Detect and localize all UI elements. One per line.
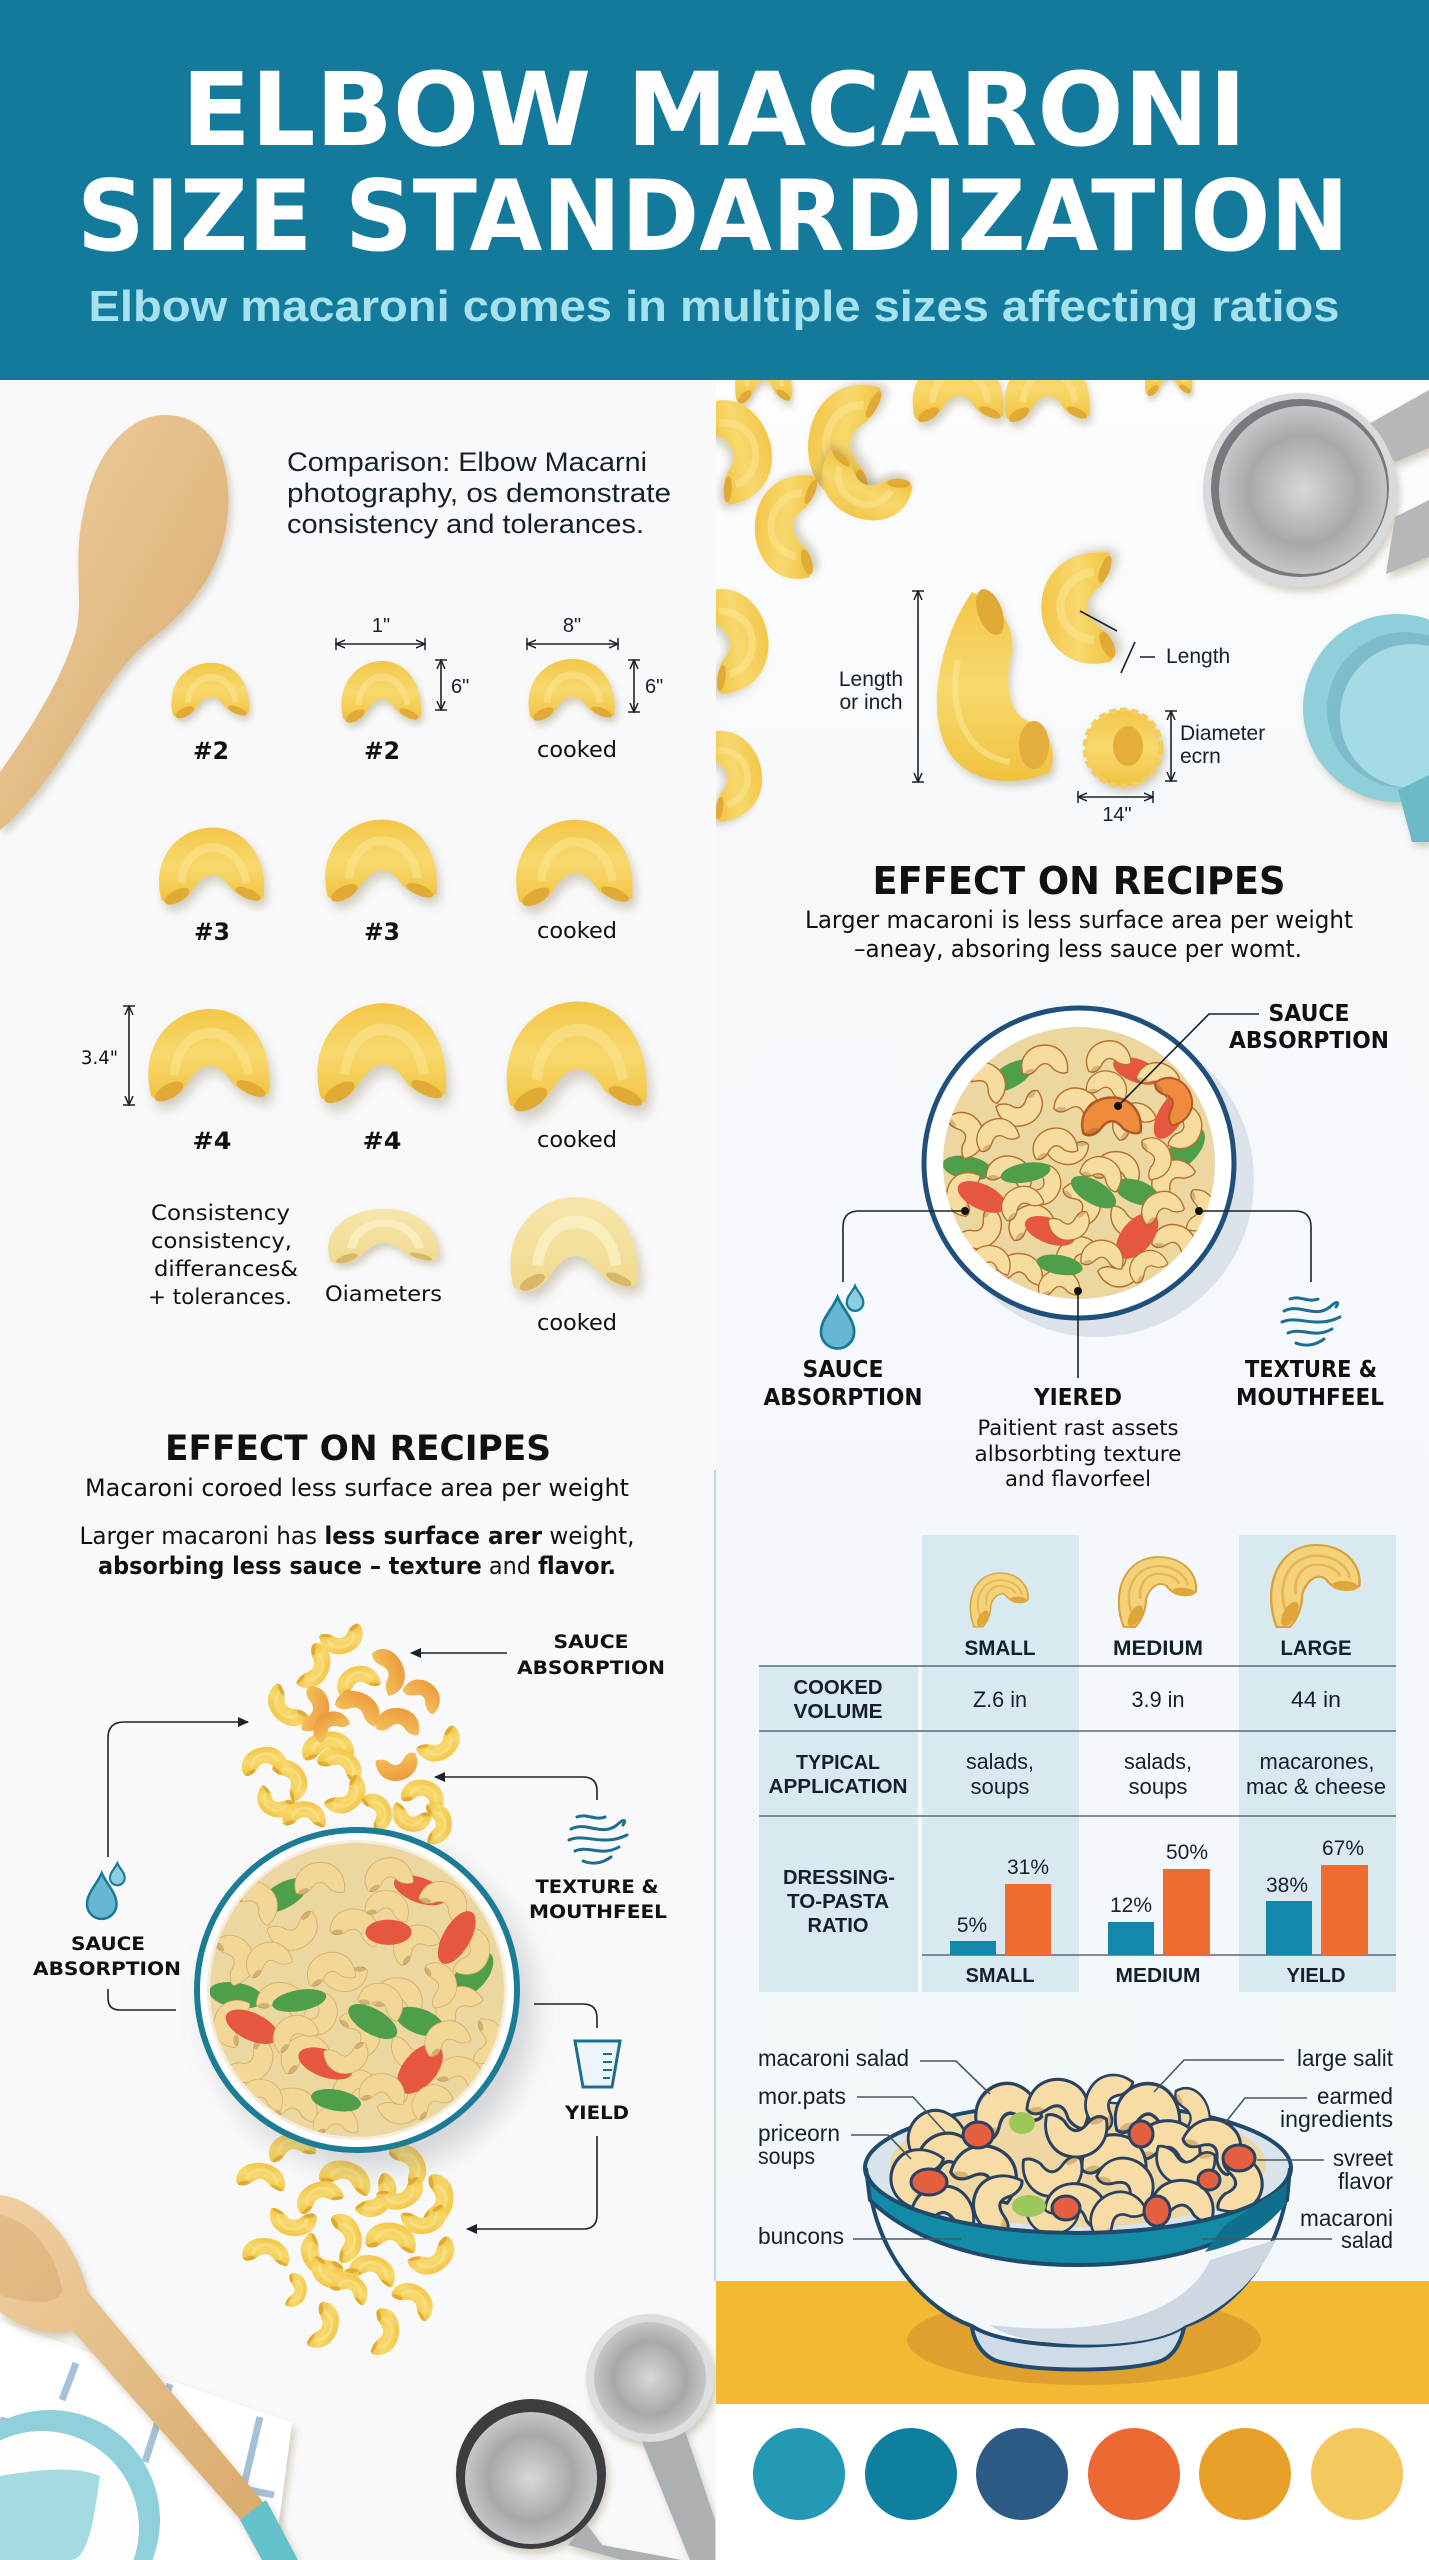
kitchen props bottom <box>0 2195 715 2560</box>
salad bowl photo <box>197 1830 517 2150</box>
bowl labels left: buncons <box>758 2223 844 2249</box>
bowl labels right: macaroni <box>1300 2205 1393 2231</box>
scattered macaroni <box>694 342 1192 823</box>
bowl tomatoes and greens <box>911 2112 1255 2226</box>
dimension: length or inch <box>839 591 918 782</box>
row: typical application: TYPICAL <box>796 1752 880 1774</box>
callout: texture and mouthfeel: MOUTHFEEL <box>529 1901 667 1923</box>
bowl labels right: flavor <box>1338 2168 1393 2194</box>
comparison intro text: Comparison: Elbow Macarni <box>287 447 647 477</box>
panel: pasta dimensions <box>694 342 1429 842</box>
dimension: diameter <box>1078 711 1265 826</box>
bar chart: yield: YIELD <box>1286 1965 1346 1987</box>
header: medium <box>1113 1557 1203 1660</box>
callout: sauce absorption left <box>764 1211 965 1411</box>
arrow: sauce absorption top: SAUCE <box>554 1631 628 1653</box>
callout: sauce absorption left: SAUCE <box>802 1357 884 1383</box>
row: cooked volume <box>794 1677 1341 1723</box>
bar chart: yield: 67% <box>1322 1837 1364 1860</box>
row: typical application: mac & cheese <box>1246 1774 1386 1799</box>
header: small <box>964 1573 1036 1660</box>
icon: teal measuring cup <box>1303 614 1429 842</box>
row: consistency: consistency, <box>151 1229 292 1253</box>
arrow: sauce absorption top: ABSORPTION <box>517 1657 665 1679</box>
row: typical application <box>768 1749 1386 1799</box>
comparison intro text: consistency and tolerances. <box>287 509 644 539</box>
row: size 2: 8" <box>563 615 581 637</box>
row: size 2: cooked <box>537 738 617 763</box>
icon: towel <box>0 2321 292 2560</box>
body text: Larger macaroni has less surface arer weight, <box>80 1522 634 1550</box>
dimension: length <box>1080 611 1230 673</box>
row: size 3: #3 <box>194 918 230 946</box>
table shading <box>759 1535 1396 1992</box>
bowl shadow <box>907 2295 1261 2385</box>
icon: teal pitcher <box>0 2410 160 2560</box>
callout: yield: albsorbting texture <box>974 1442 1182 1466</box>
bar chart: yield: 38% <box>1266 1874 1308 1897</box>
row: size 2 <box>171 615 663 765</box>
header: medium: MEDIUM <box>1113 1637 1203 1660</box>
arrow: sauce absorption top <box>411 1631 665 1679</box>
bowl labels right: ingredients <box>1280 2106 1393 2132</box>
row: size 2: #2 <box>364 737 400 765</box>
bowl contents <box>880 2065 1267 2244</box>
body text: absorbing less sauce – texture and flavor. <box>98 1552 616 1580</box>
dimension: length: Length <box>1166 645 1230 668</box>
sauce macaroni highlight <box>1082 1072 1198 1137</box>
raw macaroni pile: top <box>239 1622 467 1844</box>
bar chart: small: 31% <box>1007 1856 1049 1879</box>
bar chart: small <box>950 1856 1051 1987</box>
callout: yield <box>467 2004 629 2229</box>
dimension: length or inch: Length <box>839 668 903 691</box>
row: size 4: #4 <box>362 1127 402 1155</box>
bowl labels left: priceorn <box>758 2120 840 2146</box>
title <box>77 51 1349 274</box>
body text: –aneay, absoring less sauce per womt. <box>854 935 1302 963</box>
row: size 4 <box>81 1002 647 1155</box>
macaroni: end view <box>1085 710 1161 786</box>
callout: sauce absorption top <box>1118 1001 1389 1106</box>
header banner <box>0 0 1429 380</box>
bowl labels left: soups <box>758 2143 815 2169</box>
callout: texture and mouthfeel: TEXTURE & <box>1245 1357 1377 1383</box>
row: consistency: Consistency <box>151 1201 290 1225</box>
title: SIZE STANDARDIZATION <box>77 160 1349 274</box>
comparison intro text <box>287 447 671 539</box>
row: size 4: cooked <box>537 1128 617 1153</box>
row: size 3 <box>159 820 633 946</box>
colour palette <box>716 2404 1429 2560</box>
row: size 2: #2 <box>193 737 229 765</box>
dimension: diameter: Diameter <box>1180 722 1265 745</box>
title: ELBOW MACARONI <box>182 51 1246 170</box>
bar chart: medium: 50% <box>1166 1841 1208 1864</box>
row: cooked volume: Z.6 in <box>973 1687 1027 1712</box>
callout: texture and mouthfeel <box>1199 1211 1384 1411</box>
yellow table band <box>716 2281 1429 2404</box>
row: typical application: macarones, <box>1260 1749 1374 1774</box>
panel: effect on recipes (left) <box>0 1429 715 2560</box>
callout: yield: and flavorfeel <box>1005 1467 1151 1491</box>
swatch row <box>753 2428 1403 2520</box>
bowl labels right: large salit <box>1297 2045 1394 2071</box>
bar chart: small: 5% <box>957 1914 987 1937</box>
row: consistency: + tolerances. <box>148 1285 292 1309</box>
illustrated salad bowl <box>924 1008 1254 1337</box>
comparison intro text: photography, os demonstrate <box>287 478 671 508</box>
bowl labels right: earmed <box>1317 2083 1393 2109</box>
row: consistency: cooked <box>537 1311 617 1336</box>
macaroni: elbow view <box>1041 552 1119 664</box>
row: size 4: #4 <box>192 1127 232 1155</box>
callout: texture and mouthfeel: TEXTURE & <box>536 1876 658 1898</box>
callout: sauce absorption top: ABSORPTION <box>1229 1028 1389 1054</box>
panel: size comparison <box>0 415 671 1336</box>
body text <box>80 1474 634 1580</box>
icon: measuring cups <box>456 2314 715 2560</box>
bowl labels right <box>1154 2045 1394 2253</box>
heading: EFFECT ON RECIPES <box>165 1429 551 1469</box>
bar chart: medium: 12% <box>1110 1894 1152 1917</box>
row: size 2: 6" <box>451 676 469 698</box>
subtitle: Elbow macaroni comes in multiple sizes affecting ratios <box>88 282 1340 331</box>
row label: dressing-to-pasta ratio: DRESSING- <box>783 1867 895 1889</box>
row: consistency: differances& <box>154 1257 298 1281</box>
bar chart: small: SMALL <box>966 1965 1034 1987</box>
bowl labels right: svreet <box>1333 2145 1394 2171</box>
raw macaroni pile: bottom <box>235 2129 462 2358</box>
header: large: LARGE <box>1280 1637 1352 1660</box>
row: size 2: 1" <box>372 615 390 637</box>
icon: steel measuring cup <box>1203 390 1429 587</box>
row: size 4: 3.4" <box>81 1047 118 1069</box>
row: consistency: Oiameters <box>325 1282 442 1306</box>
row: cooked volume: 44 in <box>1291 1687 1341 1712</box>
callout: sauce absorption left: SAUCE <box>71 1933 145 1955</box>
row: typical application: soups <box>1128 1774 1188 1799</box>
body text: Macaroni coroed less surface area per weight <box>85 1474 629 1502</box>
callout: yield: YIELD <box>564 2102 629 2124</box>
callout: yield: Paitient rast assets <box>978 1416 1178 1440</box>
panel: serving bowl <box>716 2045 1429 2404</box>
body text: Larger macaroni is less surface area per weight <box>805 906 1353 934</box>
callout: sauce absorption left <box>33 1722 248 2010</box>
row: cooked volume: COOKED <box>794 1677 882 1699</box>
row: cooked volume: 3.9 in <box>1132 1687 1184 1712</box>
bar chart: medium <box>1108 1841 1210 1987</box>
panel: effect on recipes (right) <box>764 859 1389 1491</box>
header: small: SMALL <box>964 1637 1036 1660</box>
body text <box>805 906 1353 963</box>
callout: yield: YIERED <box>1033 1385 1122 1411</box>
row label: dressing-to-pasta ratio: RATIO <box>808 1915 868 1937</box>
row: size 3: cooked <box>537 919 617 944</box>
row: size 2: 6" <box>645 676 663 698</box>
header: large <box>1271 1545 1360 1660</box>
bowl labels left: macaroni salad <box>758 2045 909 2071</box>
dimension: diameter: ecrn <box>1180 745 1221 768</box>
row: cooked volume: VOLUME <box>794 1701 882 1723</box>
row: typical application: soups <box>970 1774 1030 1799</box>
table rules <box>759 1666 1396 1955</box>
icon: wooden spoon <box>0 415 228 830</box>
row label: dressing-to-pasta ratio <box>783 1867 895 1937</box>
callout: texture and mouthfeel <box>435 1777 667 1923</box>
callout: sauce absorption left: ABSORPTION <box>33 1958 181 1980</box>
illustrated serving bowl <box>865 2065 1291 2370</box>
dimension: length or inch: or inch <box>839 691 903 714</box>
icon: lower spoon <box>0 2195 298 2560</box>
row: typical application: salads, <box>1124 1749 1192 1774</box>
row: size 3: #3 <box>364 918 400 946</box>
bar chart: medium: MEDIUM <box>1116 1965 1200 1987</box>
callout: sauce absorption left: ABSORPTION <box>764 1385 922 1411</box>
callout: yield <box>974 1291 1182 1491</box>
row: typical application: salads, <box>966 1749 1034 1774</box>
row: typical application: APPLICATION <box>768 1776 908 1798</box>
callout: texture and mouthfeel: MOUTHFEEL <box>1236 1385 1384 1411</box>
bowl labels left <box>758 2045 990 2249</box>
bar chart: yield <box>1266 1837 1368 1987</box>
macaroni: side view <box>937 585 1053 781</box>
dimension: diameter: 14" <box>1102 804 1132 826</box>
bowl teal rim <box>866 2168 1290 2265</box>
row: consistency <box>148 1197 638 1336</box>
bowl labels right: salad <box>1341 2227 1393 2253</box>
callout: sauce absorption top: SAUCE <box>1268 1001 1350 1027</box>
comparison table <box>759 1535 1396 1992</box>
heading: EFFECT ON RECIPES <box>872 859 1286 903</box>
row label: dressing-to-pasta ratio: TO-PASTA <box>787 1891 889 1913</box>
bowl labels left: mor.pats <box>758 2083 846 2109</box>
